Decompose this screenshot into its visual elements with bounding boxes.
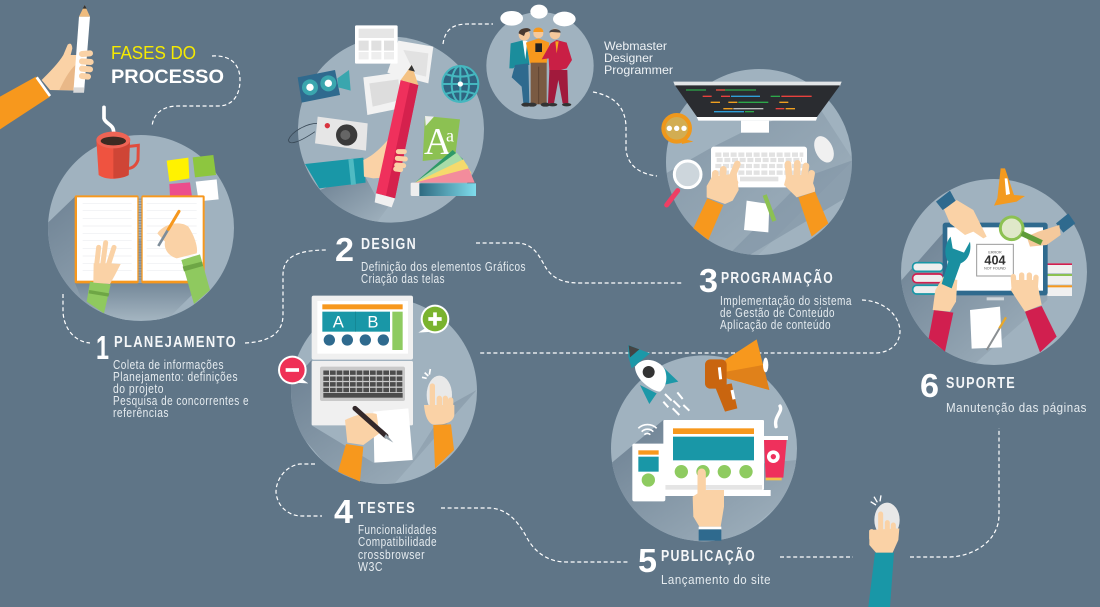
text: planejamento: referências (113, 406, 169, 420)
icon: rocket (628, 345, 689, 415)
panel: planejamento illustration (30, 107, 234, 321)
text: testes: W3C (358, 560, 383, 574)
icon: globe (442, 66, 478, 102)
icon: magnifier (667, 161, 701, 205)
text: design: 2 (335, 231, 354, 268)
icon: keyboard (711, 147, 807, 187)
icon: green type card (423, 116, 460, 163)
text: programacao (699, 262, 852, 332)
icon: coffee mug (96, 107, 138, 179)
icon: green type card: A (424, 121, 452, 163)
text: testes: 4 (334, 493, 354, 530)
title (111, 43, 224, 88)
text: design (335, 231, 526, 286)
text: testes: Funcionalidades (358, 523, 437, 537)
icon: speech bubbles (500, 5, 576, 26)
icon: laptop: B (367, 313, 379, 332)
icon: designer (526, 27, 550, 107)
icon: hand holding pencil (0, 5, 91, 129)
text: publicacao: 5 (638, 542, 657, 579)
text: suporte: Manutenção das páginas (946, 401, 1087, 415)
panel: testes illustration (278, 296, 477, 485)
icon: hand on mouse (868, 495, 900, 607)
icon: laptop: A (333, 313, 345, 332)
text: team roles: Webmaster (604, 39, 667, 53)
icon: sticky notes (167, 155, 219, 201)
text: programacao: PROGRAMAÇÃO (721, 269, 834, 287)
icon: hand with red pencil (305, 65, 418, 207)
icon: right hand on keyboard (784, 163, 828, 237)
icon: hand with green magnifier (1000, 213, 1075, 247)
text: design: Criação das telas (361, 272, 445, 286)
text: team roles (604, 39, 673, 77)
icon: desktop screen (663, 420, 771, 496)
text: suporte: 6 (920, 367, 939, 404)
text: team roles: Programmer (604, 63, 673, 77)
icon: video camera (298, 70, 351, 103)
text: design: DESIGN (361, 236, 417, 253)
text: programacao: Implementação do sistema (720, 294, 852, 308)
icon: photo camera (288, 117, 368, 151)
icon: warning cone (994, 168, 1025, 206)
text: publicacao (638, 542, 771, 587)
text: publicacao: PUBLICAÇÃO (661, 547, 756, 565)
panel: design illustration (288, 25, 484, 223)
icon: pointing hand (693, 473, 724, 541)
icon: colour fan (411, 150, 476, 196)
text: suporte: SUPORTE (946, 375, 1016, 392)
icon: writing hand (338, 408, 393, 482)
text: testes: crossbrowser (358, 548, 425, 562)
icon: phone (632, 444, 665, 501)
text: publicacao: Lançamento do site (661, 573, 771, 587)
dashed connectors (63, 24, 999, 562)
panel: programacao illustration (661, 69, 853, 257)
panel: suporte illustration (901, 168, 1087, 365)
text: programacao: de Gestão de Conteúdo (720, 306, 835, 320)
icon: tablet screen with 404 error: ERROR (988, 251, 1002, 255)
icon: pointing hand (936, 191, 987, 238)
icon: laptop (312, 296, 413, 425)
icon: monitor (673, 82, 842, 133)
text: programacao: 3 (699, 262, 718, 299)
text: planejamento (96, 329, 249, 420)
text: planejamento: Coleta de informações (113, 358, 224, 372)
icon: left hand on keyboard (693, 164, 739, 240)
icon: wifi (638, 425, 657, 435)
icon: mouse and hand (422, 369, 454, 468)
text: testes: Compatibilidade (358, 535, 437, 549)
icon: minus bubble (278, 356, 308, 384)
icon: notebook (75, 195, 205, 283)
icon: tablet screen with 404 error (943, 223, 1048, 300)
text: planejamento: Pesquisa de concorrentes e (113, 394, 249, 408)
icon: programmer (542, 29, 572, 106)
text: testes: TESTES (358, 500, 416, 517)
icon: notepad and pen (970, 307, 1006, 350)
icon: right hand writing (157, 211, 210, 304)
icon: notepad (373, 408, 413, 463)
icon: tablet screen with 404 error: NOT FOUND (984, 267, 1006, 271)
icon: paper and pencil (744, 195, 774, 232)
icon: webmaster (509, 28, 531, 107)
text: planejamento: 1 (96, 329, 109, 366)
icon: books (913, 263, 1072, 296)
icon: right hand on screen (1011, 275, 1057, 352)
title: FASES DO (111, 43, 196, 63)
text: suporte (920, 367, 1087, 415)
text: planejamento: Planejamento: definições (113, 370, 238, 384)
text: team roles: Designer (604, 51, 653, 65)
icon: hand with wrench (929, 237, 970, 352)
icon: wireframe cards (355, 25, 433, 115)
icon: megaphone (705, 339, 769, 412)
icon: green type card: a (446, 126, 454, 146)
title: PROCESSO (111, 67, 224, 88)
text: planejamento: PLANEJAMENTO (114, 334, 237, 351)
icon: cup (763, 406, 788, 480)
panel: publicacao illustration (611, 339, 797, 543)
text: design: Definição dos elementos Gráficos (361, 260, 526, 274)
text: planejamento: do projeto (113, 382, 164, 396)
icon: mouse (810, 133, 838, 166)
panel: team illustration (486, 5, 594, 119)
text: programacao: Aplicação de conteúdo (720, 318, 831, 332)
text: testes (334, 493, 437, 574)
icon: plus bubble (418, 305, 449, 333)
icon: tablet screen with 404 error: 404 (984, 254, 1006, 268)
icon: left hand (87, 243, 121, 313)
icon: chat bubble (661, 113, 693, 144)
